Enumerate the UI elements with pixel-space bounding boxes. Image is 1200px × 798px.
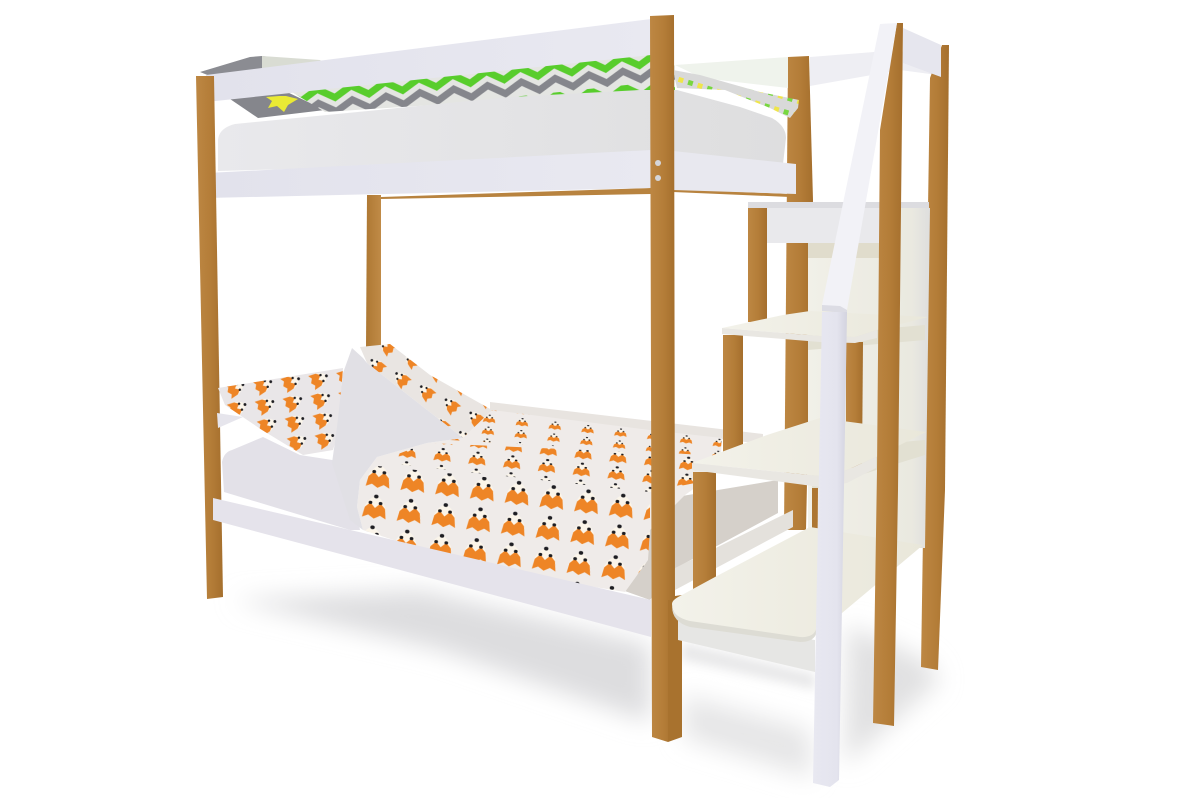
front left post: [196, 76, 223, 599]
upper mattress: [218, 90, 786, 171]
folded duvet flap: white underside: [332, 348, 463, 530]
back left post: [366, 195, 381, 348]
top right end rail: [903, 28, 941, 77]
stair tread 2: [722, 311, 928, 343]
top step: [748, 202, 929, 243]
stair risers: [693, 208, 863, 615]
upper side rail: [207, 150, 796, 199]
lower mattress right side: [622, 480, 778, 600]
back right post: [784, 56, 813, 530]
lower front rail: [213, 498, 651, 637]
white stair post and handrail: [813, 23, 897, 787]
stair tread 4: [672, 527, 923, 672]
wood stair post: [873, 23, 903, 726]
lower left head rail: [217, 413, 243, 428]
stair tread 3: [692, 418, 926, 487]
lower bed back rail: [490, 402, 763, 444]
far right post: [921, 45, 949, 670]
fox duvet: [357, 410, 722, 592]
lower side rail right: [675, 510, 793, 590]
pillow: [218, 368, 343, 455]
lower mattress: [222, 437, 360, 530]
floor shadow: [232, 590, 940, 778]
upper front guard rail: [206, 19, 651, 102]
staircase back panel: [808, 208, 930, 548]
center front post: [650, 15, 682, 742]
folded duvet flap: patterned top: [360, 344, 492, 438]
upper back rail: [675, 50, 945, 88]
upper bedding: star and chevron duvet: [200, 48, 799, 118]
